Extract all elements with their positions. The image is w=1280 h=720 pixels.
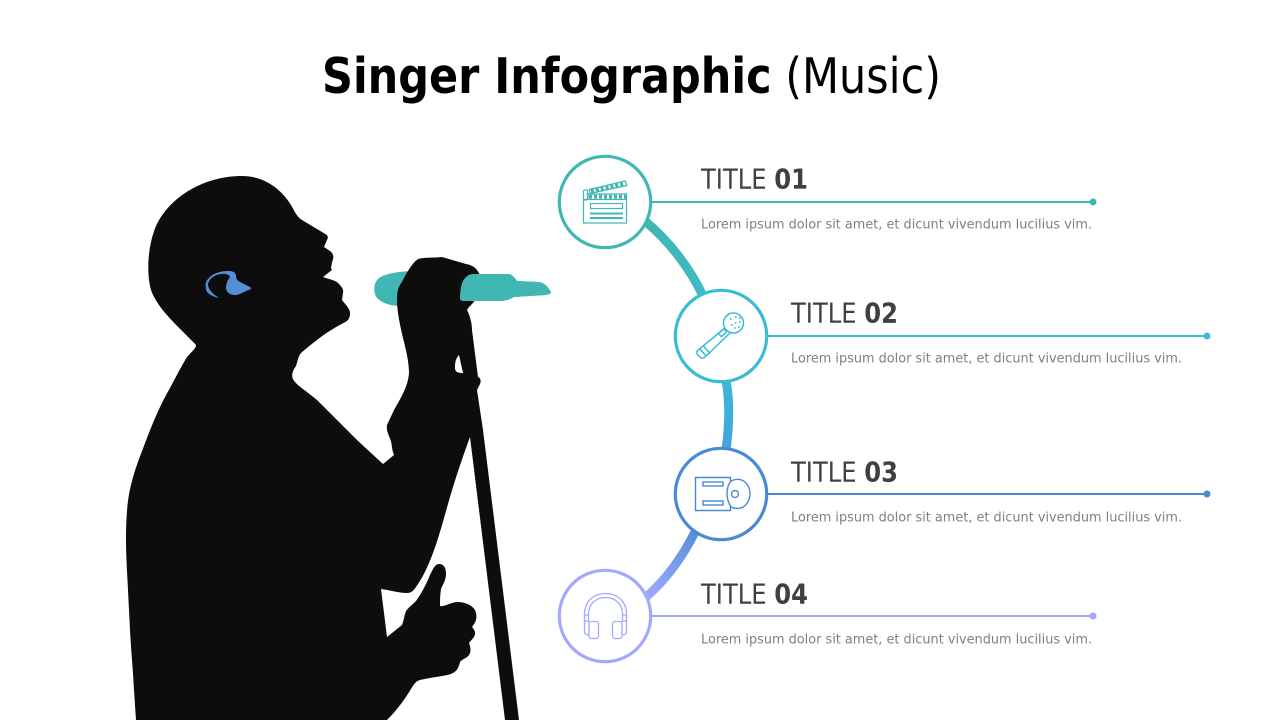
- microphone: [374, 271, 551, 306]
- circle 04: [559, 570, 651, 662]
- leader line 03: [767, 490, 1210, 498]
- icon: clapperboard: [584, 181, 627, 223]
- icon: disc case: [696, 478, 750, 510]
- item 01: [559, 156, 1096, 248]
- item 03: [675, 448, 1210, 540]
- body 03: Lorem ipsum dolor sit amet, et dicunt vivendum lucilius vim.: [791, 510, 1182, 526]
- heading 01: TITLE 01: [700, 164, 808, 196]
- ear monitor: [206, 271, 251, 298]
- body 04: Lorem ipsum dolor sit amet, et dicunt vivendum lucilius vim.: [701, 632, 1092, 648]
- leader line 01: [651, 198, 1096, 206]
- item 04: [559, 570, 1096, 662]
- icon: headphones: [584, 594, 626, 638]
- heading 02: TITLE 02: [790, 298, 898, 330]
- connecting arc: 01 to 02: [646, 222, 703, 296]
- body 01: Lorem ipsum dolor sit amet, et dicunt vivendum lucilius vim.: [701, 216, 1092, 232]
- heading 03: TITLE 03: [790, 456, 898, 488]
- item 02: [675, 290, 1210, 382]
- connecting arc: 03 to 04: [646, 532, 695, 597]
- body: [126, 176, 519, 720]
- connecting arc: 02 to 03: [726, 380, 729, 450]
- mic front over hand: [460, 274, 551, 301]
- title: Singer Infographic (Music): [322, 48, 941, 105]
- heading 04: TITLE 04: [700, 578, 808, 610]
- leader line 02: [767, 332, 1210, 340]
- leader line 04: [651, 612, 1096, 620]
- icon: microphone: [697, 313, 744, 358]
- circle 02: [675, 290, 767, 382]
- body 02: Lorem ipsum dolor sit amet, et dicunt vivendum lucilius vim.: [791, 350, 1182, 366]
- circle 03: [675, 448, 767, 540]
- singer silhouette: [126, 176, 551, 720]
- circle 01: [559, 156, 651, 248]
